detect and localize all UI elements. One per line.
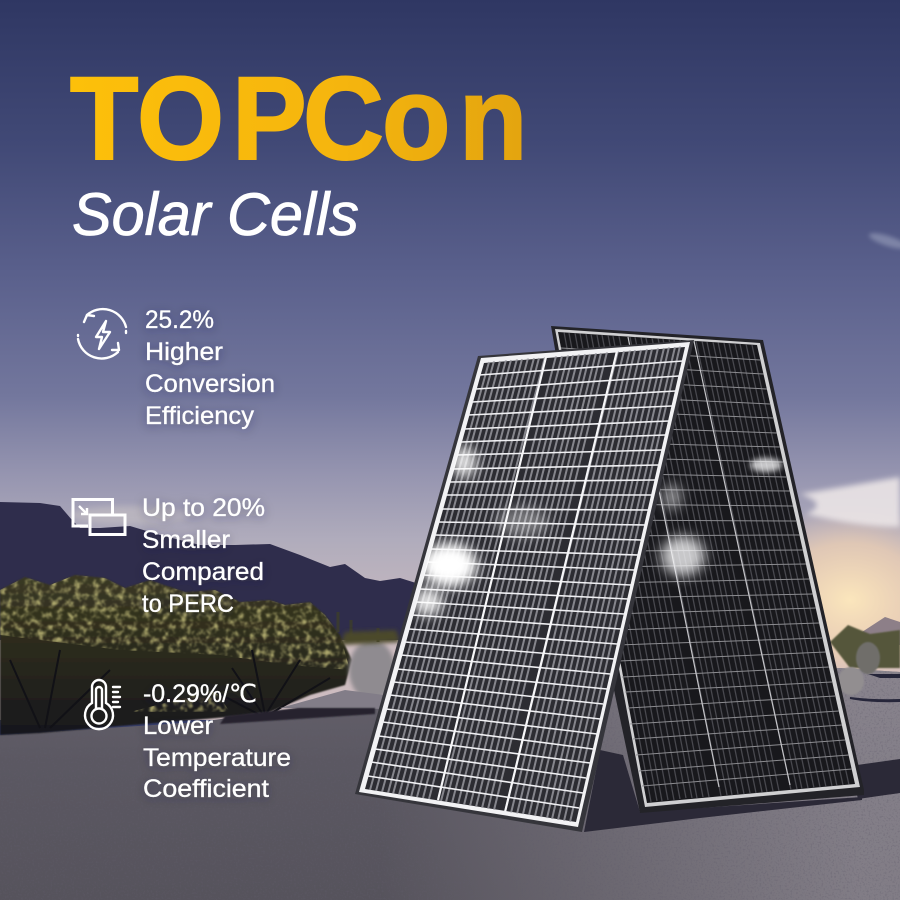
feature: smaller size: Compared [142,558,264,586]
solar panel: back [551,326,864,813]
feature: conversion efficiency [145,306,275,430]
feature: temperature coefficient: Temperature [143,744,291,772]
feature: temperature coefficient: Coefficient [143,775,269,803]
icon: smaller size rectangles [73,500,125,534]
feature: conversion efficiency: Efficiency [145,402,255,430]
mountains [0,502,900,645]
feature: smaller size: to PERC [142,590,234,618]
background: dusk desert sky [0,0,900,720]
feature: smaller size: Up to 20% [142,494,265,522]
feature: temperature coefficient: -0.29%/℃ [143,680,257,708]
feature: smaller size: Smaller [142,526,230,554]
title: TOPCon: TOPCon [70,54,527,185]
feature: smaller size [142,494,265,618]
solar panel: front [355,340,694,832]
icon: thermometer [85,680,120,729]
ground [0,668,900,900]
feature: conversion efficiency: Higher [145,338,223,366]
panel shadow on ground [584,750,900,832]
subtitle: Solar Cells: Solar Cells [72,181,359,248]
feature: conversion efficiency: 25.2% [145,306,214,334]
shrubs [0,575,900,735]
feature: temperature coefficient [143,680,291,803]
icon: efficiency cycle with lightning bolt [78,309,126,359]
feature: temperature coefficient: Lower [143,712,213,740]
feature: conversion efficiency: Conversion [145,370,275,398]
